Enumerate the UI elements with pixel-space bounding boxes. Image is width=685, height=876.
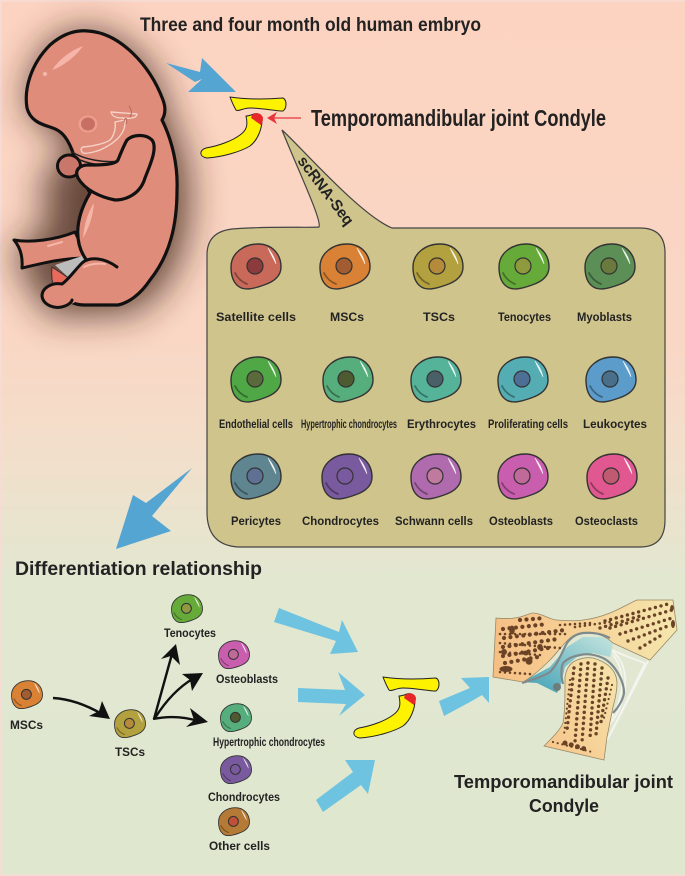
cell: Osteoblasts: Osteoblasts xyxy=(489,514,553,528)
large pores xyxy=(500,605,675,672)
blue arrow: embryo to condyle xyxy=(166,58,236,92)
cell: Osteoblasts small: Osteoblasts xyxy=(216,674,278,686)
articular disc xyxy=(522,637,613,693)
cell: Tenocytes small xyxy=(164,595,216,640)
cell: MSCs small: MSCs xyxy=(10,720,43,732)
red wedge xyxy=(52,267,70,291)
cell: Endothelial cells xyxy=(219,357,293,431)
cell: Proliferating cells xyxy=(488,357,568,431)
cell: Schwann cells xyxy=(395,454,473,528)
temporal part xyxy=(230,97,286,111)
arrow: MSCs to TSCs xyxy=(53,698,110,719)
eye xyxy=(78,116,98,132)
cell: Leukocytes: Leukocytes xyxy=(583,417,647,431)
cell: Leukocytes xyxy=(583,357,647,431)
lower leg and foot xyxy=(42,259,117,307)
cell: Hypertrophic chondrocytes xyxy=(301,357,397,431)
red arrow to condyle xyxy=(267,112,301,124)
joint anatomy illustration xyxy=(493,600,677,760)
red cap small xyxy=(404,693,416,705)
cell: Satellite cells xyxy=(216,244,296,324)
cell: MSCs: MSCs xyxy=(330,310,364,324)
cell: Hypertrophic chondrocytes: Hypertrophic chondrocytes xyxy=(301,417,397,431)
cell: MSCs xyxy=(320,244,370,324)
cartilage lines xyxy=(522,633,624,713)
cell: Osteoclasts xyxy=(575,454,638,528)
cell: Schwann cells: Schwann cells xyxy=(395,514,473,528)
disc end xyxy=(553,683,561,691)
joint caption: Condyle xyxy=(529,796,599,816)
cell: Osteoblasts xyxy=(489,454,553,528)
cell: Chondrocytes small xyxy=(208,756,280,804)
cell: TSCs: TSCs xyxy=(423,310,455,324)
scRNA-Seq label: scRNA-Seq xyxy=(294,153,357,229)
cell: Tenocytes: Tenocytes xyxy=(498,310,551,324)
extended leg xyxy=(14,232,88,268)
temporal part small xyxy=(383,677,439,691)
developing jaw outline xyxy=(81,112,137,153)
cell: Pericytes xyxy=(231,454,281,528)
cell: TSCs small xyxy=(114,710,146,759)
cell: TSCs small: TSCs xyxy=(115,747,145,759)
condyle illustration small xyxy=(354,677,439,738)
bone pores lower xyxy=(553,663,612,752)
cell: TSCs xyxy=(413,244,463,324)
cell: Endothelial cells: Endothelial cells xyxy=(219,417,293,431)
cell: Erythrocytes xyxy=(407,357,476,431)
cell: Hypertrophic chondrocytes small xyxy=(213,704,325,749)
joint caption: Temporomandibular joint xyxy=(454,772,673,792)
arm xyxy=(77,135,154,200)
cell: Chondrocytes small: Chondrocytes xyxy=(208,792,280,804)
cell: Osteoclasts: Osteoclasts xyxy=(575,514,638,528)
mandibular part xyxy=(201,114,262,158)
light blue arrow middle xyxy=(298,672,365,716)
arrow: TSCs to Osteoblasts xyxy=(155,673,203,718)
cell: Hypertrophic chondrocytes small: Hypertrophic chondrocytes xyxy=(213,737,325,749)
jaw lines xyxy=(72,152,120,165)
lower condyle bone xyxy=(544,658,617,760)
blue arrow: panel to differentiation xyxy=(116,468,192,549)
light blue arrow top xyxy=(274,608,358,654)
light blue arrow to joint xyxy=(439,677,489,716)
arrow: TSCs to Hypertrophic chondrocytes xyxy=(153,708,208,727)
cell: Osteoblasts small xyxy=(216,641,278,686)
cell: Myoblasts xyxy=(577,244,635,324)
condyle heading: Temporomandibular joint Condyle xyxy=(311,105,606,131)
mandibular part small xyxy=(354,694,415,738)
arrow: TSCs to Tenocytes xyxy=(154,644,180,719)
leg highlights xyxy=(48,242,105,267)
embryo illustration xyxy=(14,31,177,307)
cell: Chondrocytes xyxy=(302,454,379,528)
cell: Other cells small xyxy=(209,808,270,853)
panel background with callout tail xyxy=(207,130,665,547)
cell: Erythrocytes: Erythrocytes xyxy=(407,417,476,431)
embryo shadow xyxy=(12,30,190,316)
head highlight xyxy=(52,46,83,70)
bone pores upper xyxy=(500,604,672,674)
cell: Tenocytes small: Tenocytes xyxy=(164,628,216,640)
embryo head and body xyxy=(26,31,177,305)
ear mark xyxy=(124,106,131,124)
umbilical area xyxy=(55,255,90,279)
belly highlight xyxy=(83,203,94,238)
title: Three and four month old human embryo xyxy=(140,14,481,36)
cell: Chondrocytes: Chondrocytes xyxy=(302,514,379,528)
cell: MSCs small xyxy=(10,681,43,732)
lower leg outline xyxy=(42,259,117,307)
joint caption xyxy=(454,772,673,816)
ligaments xyxy=(607,650,648,740)
red cap xyxy=(251,113,263,125)
light blue arrow bottom xyxy=(316,760,375,812)
cell: Other cells small: Other cells xyxy=(209,841,270,853)
panel: cell types xyxy=(207,130,665,547)
cell: Proliferating cells: Proliferating cells xyxy=(488,417,568,431)
cell: Myoblasts: Myoblasts xyxy=(577,310,632,324)
hand xyxy=(58,155,80,177)
cell: Satellite cells: Satellite cells xyxy=(216,310,296,324)
cell: Tenocytes xyxy=(498,244,551,324)
condyle illustration xyxy=(201,97,286,158)
differentiation heading: Differentiation relationship xyxy=(15,559,262,580)
upper temporal bone xyxy=(493,600,677,682)
cell: Pericytes: Pericytes xyxy=(231,514,281,528)
highlight dot xyxy=(43,72,47,76)
